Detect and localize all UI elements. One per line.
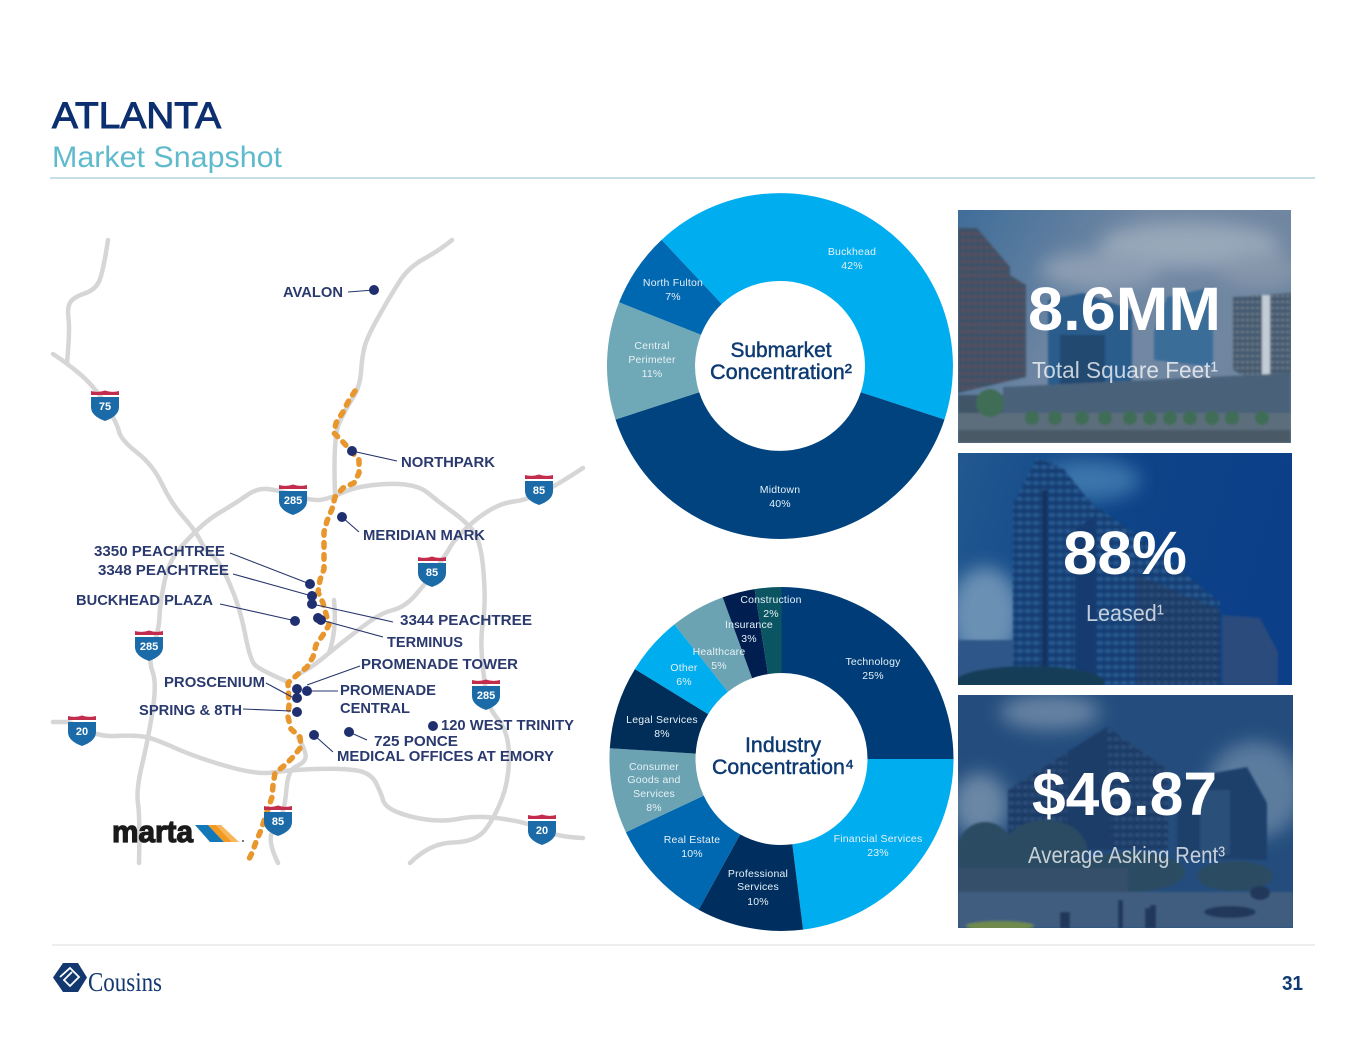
stat label: Leased¹ — [1086, 600, 1164, 626]
slice labels: Services — [737, 881, 779, 893]
title: Market Snapshot — [52, 141, 283, 174]
title: ATLANTA — [52, 95, 221, 136]
photo: office tower — [958, 453, 1292, 685]
property labels: 3344 PEACHTREE — [400, 612, 532, 629]
icon: hexagon mark — [53, 963, 87, 992]
MARTA rail line — [247, 391, 359, 863]
property labels — [76, 284, 574, 765]
slice labels: Financial Services — [834, 833, 922, 845]
interstate shields: 285 — [284, 495, 302, 507]
slice labels — [628, 246, 876, 510]
slice labels: Services — [633, 788, 675, 800]
slice labels: 10% — [747, 896, 769, 908]
slice: North Fulton 7% — [619, 240, 722, 335]
slice labels: 10% — [681, 848, 703, 860]
donut chart: submarket concentration — [607, 193, 953, 539]
leader lines — [220, 290, 397, 752]
property labels: 120 WEST TRINITY — [441, 717, 574, 734]
property labels: SPRING & 8TH — [139, 702, 242, 719]
slice labels: 42% — [841, 260, 863, 272]
stat: $46.87: $46.87 — [1032, 760, 1217, 828]
slice labels: Other — [670, 662, 698, 674]
slice labels: Healthcare — [693, 646, 745, 658]
property labels: PROMENADE — [340, 682, 436, 699]
interstate shields: 20 — [76, 726, 88, 738]
slice labels: 11% — [642, 368, 662, 380]
interstate shields: 85 — [533, 485, 545, 497]
MARTA logo — [112, 814, 244, 849]
slice labels: 2% — [763, 608, 779, 620]
center heading: Concentration⁴ — [712, 756, 854, 779]
slice labels: Technology — [845, 656, 901, 668]
slice labels: 8% — [646, 802, 662, 814]
slice labels: Buckhead — [828, 246, 876, 258]
slice labels: Consumer — [629, 761, 679, 773]
panel: average asking rent — [952, 694, 1303, 931]
interstate shields — [68, 390, 556, 845]
slice labels: 3% — [741, 633, 757, 645]
slice labels: Goods and — [627, 774, 681, 786]
slice: Healthcare 5% — [674, 597, 752, 692]
slice: Real Estate 10% — [626, 796, 740, 910]
Cousins logo — [53, 963, 162, 997]
slice: Construction 2% — [755, 587, 782, 674]
property labels: 3348 PEACHTREE — [98, 562, 229, 579]
slice: Midtown 40% — [616, 392, 944, 539]
slice labels: 5% — [711, 660, 727, 672]
interstate shields: 285 — [477, 690, 495, 702]
slice: Insurance 3% — [723, 589, 768, 678]
center heading — [712, 734, 854, 779]
title — [52, 95, 283, 174]
property labels: MEDICAL OFFICES AT EMORY — [337, 748, 554, 765]
MARTA logo: marta — [112, 814, 194, 849]
property dots — [290, 285, 438, 740]
slice labels: 23% — [867, 847, 889, 859]
wordmark: Cousins — [88, 967, 162, 997]
center heading: Submarket — [730, 339, 832, 362]
stat label: Average Asking Rent³ — [1028, 842, 1225, 868]
photo: towers and podium — [958, 210, 1291, 443]
property labels: 3350 PEACHTREE — [94, 543, 225, 560]
slice labels: Legal Services — [626, 714, 698, 726]
stat: 8.6MM: 8.6MM — [1028, 275, 1221, 343]
property labels: 725 PONCE — [374, 733, 458, 750]
property labels: AVALON — [283, 284, 343, 301]
property labels: CENTRAL — [340, 700, 410, 717]
map of Atlanta — [53, 240, 583, 863]
center heading: Concentration² — [710, 361, 852, 384]
slice labels: 25% — [862, 670, 884, 682]
highways — [53, 240, 583, 863]
slice: Legal Services 8% — [610, 669, 708, 754]
slice labels: 7% — [665, 291, 681, 303]
slice labels — [626, 594, 922, 908]
slice labels: Central — [634, 340, 670, 352]
stat label: Total Square Feet¹ — [1032, 357, 1218, 383]
slice labels: Midtown — [760, 484, 800, 496]
panel: leased — [949, 453, 1292, 698]
center heading: Industry — [745, 734, 822, 757]
property labels: NORTHPARK — [401, 454, 495, 471]
slice: Other 6% — [635, 624, 728, 714]
interstate shields: 20 — [536, 825, 548, 837]
slice labels: Real Estate — [664, 834, 720, 846]
slice: Buckhead 42% — [662, 193, 953, 420]
property labels: PROMENADE TOWER — [361, 656, 518, 673]
interstate shields: 85 — [426, 567, 438, 579]
slice labels: 8% — [654, 728, 670, 740]
page number: 31 — [1282, 973, 1303, 995]
property labels: BUCKHEAD PLAZA — [76, 592, 213, 609]
donut chart: industry concentration — [609, 587, 954, 931]
slice: Central Perimeter 11% — [607, 302, 701, 420]
panel: total square feet — [958, 210, 1300, 443]
interstate shields: 85 — [272, 816, 284, 828]
slice: Financial Services 23% — [792, 759, 954, 930]
interstate shields: 285 — [140, 641, 158, 653]
slice labels: Insurance — [725, 619, 773, 631]
center heading — [710, 339, 852, 384]
slice labels: Perimeter — [628, 354, 676, 366]
slice: Professional Services 10% — [699, 834, 803, 931]
slice labels: 6% — [676, 676, 692, 688]
slice: Technology 25% — [782, 587, 954, 759]
property labels: PROSCENIUM — [164, 674, 265, 691]
photo: mixed-use plaza — [958, 695, 1293, 928]
slice labels: North Fulton — [643, 277, 703, 289]
property labels: MERIDIAN MARK — [363, 527, 485, 544]
property labels: TERMINUS — [387, 634, 463, 651]
slice labels: Construction — [740, 594, 802, 606]
interstate shields: 75 — [99, 401, 111, 413]
slice: Consumer Goods and Services 8% — [609, 748, 704, 832]
slice labels: 40% — [769, 498, 791, 510]
stat: 88%: 88% — [1063, 519, 1187, 587]
slice labels: Professional — [728, 868, 788, 880]
